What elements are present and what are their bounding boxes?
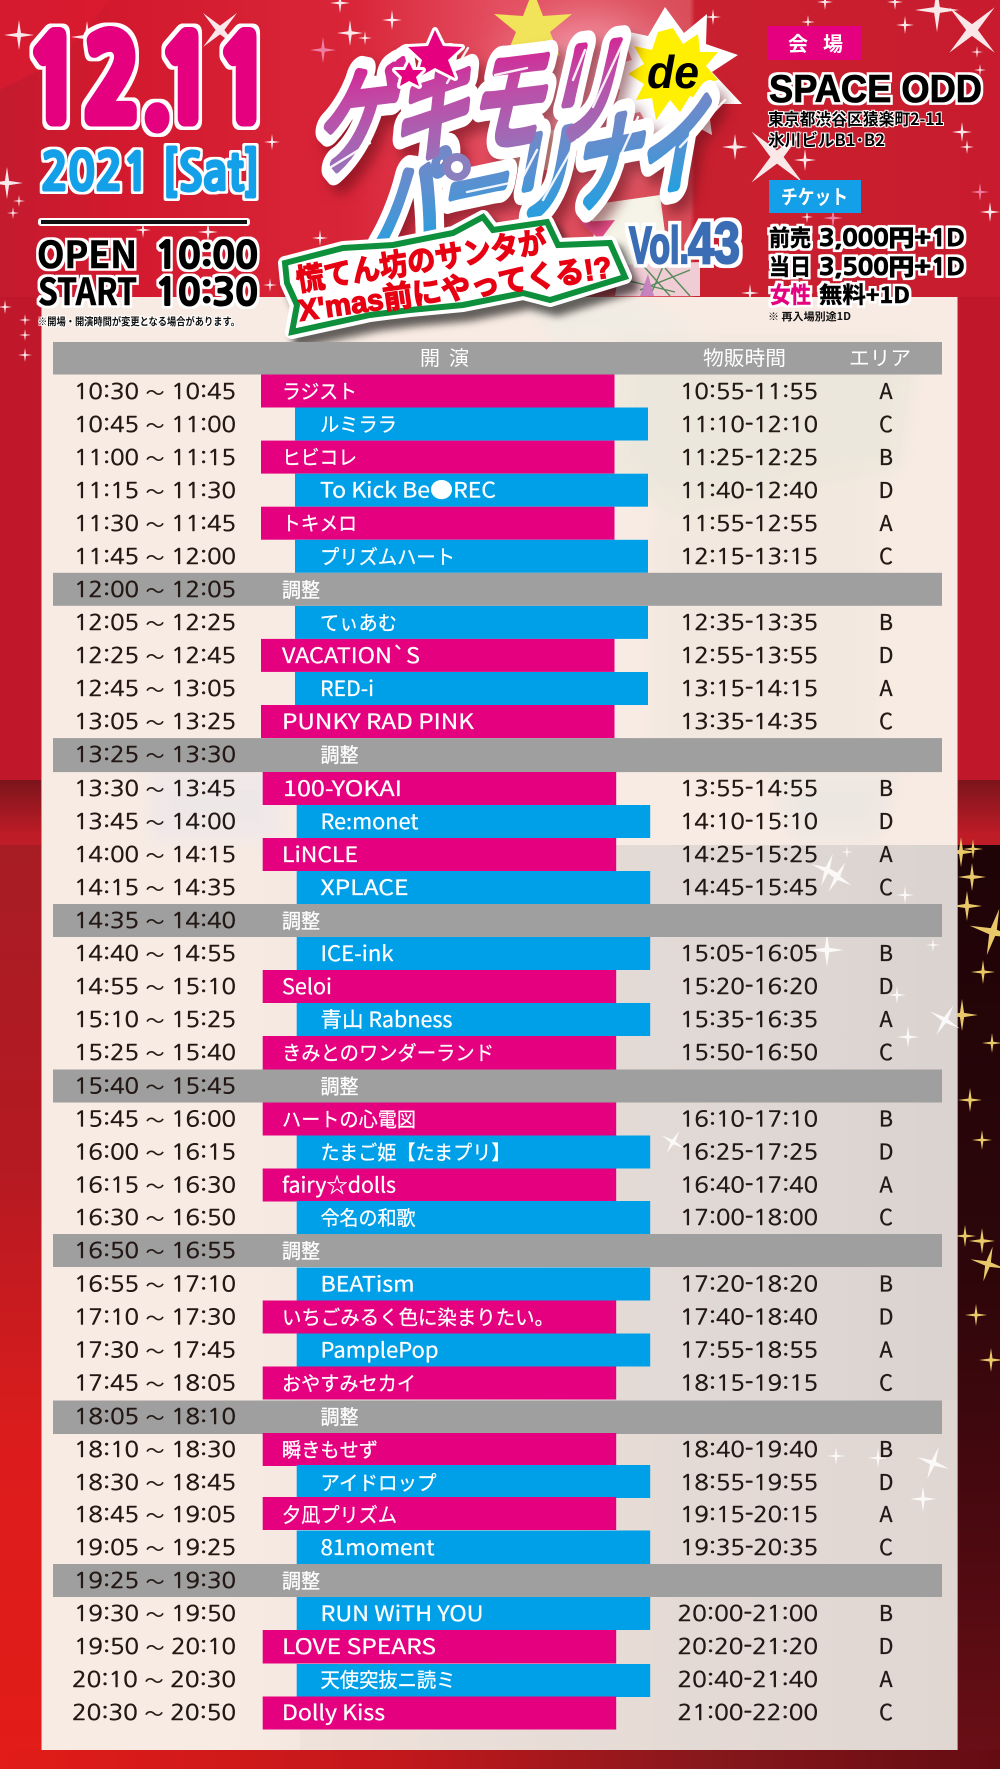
row 16:15 fairy☆dolls: fairy☆dolls [282,1170,396,1200]
volume number: 43 [688,211,740,276]
row 18:10 瞬きもせず: B [879,1433,893,1464]
row 12:25 VACATION`S [74,639,893,672]
label: ticket: チケット [781,181,848,210]
venue name and address: 東京都渋谷区猿楽町2-11 [768,106,944,130]
row 19:05 81moment [74,1530,893,1564]
row 15:25 きみとのワンダーランド: きみとのワンダーランド [282,1037,494,1066]
row 11:00 ヒビコレ: B [879,441,893,472]
row 15:40 調整 [53,1070,942,1102]
row 14:35 調整: 14:35 ～ 14:40 [74,908,236,933]
row 14:35 調整 [53,904,942,937]
row 12:45 RED-i [74,672,893,705]
row 16:50 調整: 16:50 ～ 16:55 [74,1238,236,1263]
row 18:10 瞬きもせず: 瞬きもせず [282,1434,378,1463]
row 20:30 Dolly Kiss: 21:00-22:00 [678,1703,818,1724]
row 19:25 調整: 調整 [282,1565,320,1594]
note on time changes: ※開場・開演時間が変更となる場合があります。 [38,314,240,329]
row 18:30 アイドロップ: 18:30 ～ 18:45 [74,1470,236,1495]
row 15:10 青山 Rabness: A [879,1003,893,1034]
row 16:55 BEATism: 17:20-18:20 [680,1274,818,1296]
row 14:00 LiNCLE: 14:00 ～ 14:15 [74,842,236,867]
panel: timetable background [42,297,968,1750]
banner: subtitle: 慌てん坊のサンタが [293,217,549,300]
row 15:10 青山 Rabness: 15:35-16:35 [680,1010,818,1031]
row 15:10 青山 Rabness: 青山 Rabness [320,1004,453,1034]
row 13:30 100-YOKAI: B [879,772,893,803]
row 13:30 100-YOKAI: 100-YOKAI [283,773,402,803]
row 16:30 令名の和歌: C [879,1201,893,1232]
row 14:15 XPLACE: 14:45-15:45 [680,878,818,899]
row 18:30 アイドロップ: アイドロップ [320,1467,436,1496]
venue name and address: 氷川ビルB1･B2 [768,127,885,151]
row 11:00 ヒビコレ: ヒビコレ [282,442,357,471]
row 12:05 てぃあむ: 12:35-13:35 [680,613,818,634]
row 14:55 Seloi: 15:20-16:20 [680,977,818,998]
row 15:40 調整: 15:40 ～ 15:45 [74,1074,236,1098]
row 11:45 プリズムハート: プリズムハート [320,541,455,570]
ticket prices: 女性 [770,278,811,310]
row 18:30 アイドロップ: 18:55-19:55 [680,1473,818,1494]
row 19:30 RUN WiTH YOU: 19:30 ～ 19:50 [74,1601,236,1626]
row 13:45 Re:monet: 14:10-15:10 [680,812,818,833]
row 11:15 To Kick Be●REC: D [879,474,893,505]
row 20:30 Dolly Kiss [72,1696,893,1730]
row 12:45 RED-i: 13:15-14:15 [680,679,818,700]
row 18:45 夕凪プリズム: A [879,1498,893,1529]
row 18:30 アイドロップ [74,1465,893,1498]
row 20:10 天使突抜ニ読ミ: 20:40-21:40 [678,1670,818,1691]
row 12:05 てぃあむ: 12:05 ～ 12:25 [74,610,236,635]
row 16:30 令名の和歌: 令名の和歌 [320,1202,416,1231]
row 17:10 いちごみるく色に染まりたい。: いちごみるく色に染まりたい。 [282,1302,554,1330]
row 18:30 アイドロップ: D [879,1466,893,1497]
row 17:45 おやすみセカイ: 17:45 ～ 18:05 [74,1370,236,1396]
row 15:10 青山 Rabness: 15:10 ～ 15:25 [74,1007,236,1032]
row 20:10 天使突抜ニ読ミ: 天使突抜ニ読ミ [320,1664,456,1693]
row 17:30 PamplePop: 17:55-18:55 [680,1340,818,1362]
row 12:45 RED-i: A [879,672,893,703]
row 11:15 To Kick Be●REC: 11:40-12:40 [680,481,818,502]
row 14:15 XPLACE [74,871,893,904]
row 11:30 トキメロ: 11:55-12:55 [680,514,818,535]
row 19:05 81moment: C [879,1531,893,1562]
row 19:50 LOVE SPEARS: LOVE SPEARS [282,1631,436,1661]
year and weekday: 2021 [Sat] [41,147,260,198]
row 16:50 調整: 調整 [282,1235,320,1264]
row 11:30 トキメロ: A [879,507,893,538]
row 16:30 令名の和歌 [74,1201,893,1234]
row 10:30 ラジスト: A [879,375,893,406]
table header [53,342,942,374]
row 19:25 調整: 19:25 ～ 19:30 [74,1568,236,1593]
row 13:05 PUNKY RAD PINK: 13:35-14:35 [680,712,818,733]
venue name and address: SPACE ODD [769,68,982,111]
row 19:50 LOVE SPEARS [74,1630,893,1664]
row 18:05 調整: 調整 [320,1401,358,1430]
icon: stars on logo [395,30,462,86]
row 16:15 fairy☆dolls [74,1168,893,1202]
row 14:00 LiNCLE: 14:25-15:25 [680,845,818,866]
row 11:00 ヒビコレ [74,441,893,474]
row 18:05 調整: 18:05 ～ 18:10 [74,1404,236,1429]
row 14:00 LiNCLE: LiNCLE [282,839,358,869]
row 12:45 RED-i: 12:45 ～ 13:05 [74,676,236,701]
row 12:00 調整: 12:00 ～ 12:05 [74,577,236,602]
open and start times: 10:30 [155,274,258,311]
row 11:45 プリズムハート: 11:45 ～ 12:00 [74,544,236,569]
row 10:45 ルミララ: C [879,408,893,439]
badge: de starburst [605,7,742,138]
label: venue: 会 場 [788,28,843,57]
row 11:45 プリズムハート: 12:15-13:15 [680,547,818,568]
row 14:55 Seloi: 14:55 ～ 15:10 [74,974,236,999]
date: 12.11: 12.11 [27,26,271,137]
decoration: tree top star and flowers behind logo [494,0,700,296]
row 16:55 BEATism: B [879,1268,893,1298]
row 18:45 夕凪プリズム [74,1497,893,1530]
row 10:30 ラジスト: ラジスト [282,376,357,404]
divider line [38,218,250,226]
row 11:45 プリズムハート [74,540,893,573]
row 13:05 PUNKY RAD PINK [74,705,893,738]
row 15:45 ハートの心電図 [74,1102,893,1136]
venue name and address [768,68,982,151]
row 17:45 おやすみセカイ [74,1366,893,1400]
row 18:10 瞬きもせず: 18:10 ～ 18:30 [74,1437,236,1462]
row 14:00 LiNCLE [74,838,893,871]
row 15:10 青山 Rabness [74,1003,893,1036]
row 13:05 PUNKY RAD PINK: PUNKY RAD PINK [282,706,474,736]
row 15:45 ハートの心電図: B [879,1102,893,1134]
volume number: Vol. [629,217,689,275]
row 16:30 令名の和歌: 16:30 ～ 16:50 [74,1205,236,1230]
ticket prices: 前売 [769,221,811,253]
row 19:05 81moment: 19:05 ～ 19:25 [74,1535,236,1560]
row 13:25 調整: 13:25 ～ 13:30 [74,742,236,767]
row 19:30 RUN WiTH YOU: RUN WiTH YOU [320,1598,484,1628]
row 18:45 夕凪プリズム: 夕凪プリズム [282,1499,397,1528]
ticket prices: 3,000円+1D [819,228,965,250]
row 11:45 プリズムハート: C [879,540,893,571]
row 10:30 ラジスト [74,374,893,408]
row 18:45 夕凪プリズム: 19:15-20:15 [680,1505,818,1526]
row 15:45 ハートの心電図: 16:10-17:10 [680,1110,818,1130]
row 20:10 天使突抜ニ読ミ: 20:10 ～ 20:30 [72,1667,236,1692]
row 12:00 調整: 調整 [282,574,320,603]
row 20:10 天使突抜ニ読ミ [72,1663,893,1697]
row 19:25 調整 [53,1564,942,1597]
row 14:55 Seloi: Seloi [282,971,332,1001]
badge: de starburst: de [647,46,699,98]
row 10:45 ルミララ [74,408,893,440]
ticket prices: 当日 [769,250,811,282]
row 15:25 きみとのワンダーランド: C [879,1036,893,1067]
row 16:00 たまご姫【たまプリ】: 16:25-17:25 [680,1142,818,1164]
row 11:15 To Kick Be●REC [74,474,893,507]
row 14:15 XPLACE: C [879,871,893,902]
row 17:30 PamplePop: 17:30 ～ 17:45 [74,1338,236,1362]
row 16:50 調整 [53,1234,942,1267]
row 16:00 たまご姫【たまプリ】 [74,1136,893,1168]
row 13:05 PUNKY RAD PINK: 13:05 ～ 13:25 [74,709,236,734]
row 13:45 Re:monet: 13:45 ～ 14:00 [74,809,236,834]
label: venue [768,26,861,60]
row 13:30 100-YOKAI: 13:55-14:55 [680,779,818,800]
row 10:45 ルミララ: ルミララ [320,408,397,438]
logo title [306,0,726,279]
row 17:30 PamplePop [74,1334,893,1366]
ticket prices [768,221,965,324]
row 10:45 ルミララ: 11:10-12:10 [680,415,818,436]
row 16:55 BEATism [74,1268,893,1300]
row 14:55 Seloi [74,970,893,1003]
row 14:40 ICE-ink: ICE-ink [320,938,394,968]
row 13:05 PUNKY RAD PINK: C [879,705,893,736]
open and start times: OPEN [37,225,137,279]
row 18:05 調整 [53,1400,942,1434]
row 17:10 いちごみるく色に染まりたい。: 17:10 ～ 17:30 [74,1304,236,1330]
row 13:25 調整 [53,738,942,772]
row 19:30 RUN WiTH YOU: B [879,1597,893,1628]
row 11:30 トキメロ: 11:30 ～ 11:45 [74,511,236,536]
row 16:00 たまご姫【たまプリ】: たまご姫【たまプリ】 [320,1136,510,1166]
row 17:45 おやすみセカイ: おやすみセカイ [282,1368,416,1396]
row 12:45 RED-i: RED-i [320,673,374,703]
row 19:30 RUN WiTH YOU: 20:00-21:00 [678,1604,818,1625]
ticket prices: 無料+1D [819,278,910,310]
row 13:30 100-YOKAI [74,772,893,805]
row 19:05 81moment: 19:35-20:35 [680,1538,818,1559]
row 19:50 LOVE SPEARS: D [879,1630,893,1661]
row 12:05 てぃあむ: てぃあむ [320,607,397,636]
row 16:15 fairy☆dolls: 16:40-17:40 [680,1176,818,1196]
row 18:10 瞬きもせず [74,1433,893,1466]
timetable rows [53,374,942,1730]
row 17:45 おやすみセカイ: C [879,1366,893,1398]
row 15:25 きみとのワンダーランド [74,1036,893,1070]
row 11:15 To Kick Be●REC: To Kick Be●REC [320,475,496,505]
row 12:05 てぃあむ: B [879,606,893,637]
row 14:40 ICE-ink: B [879,937,893,968]
row 19:30 RUN WiTH YOU [74,1597,893,1630]
banner: subtitle [285,217,625,332]
ticket prices: ※ 再入場別途1D [768,309,851,324]
row 12:25 VACATION`S: 12:55-13:55 [680,646,818,667]
row 10:30 ラジスト: 10:30 ～ 10:45 [74,379,236,404]
row 16:15 fairy☆dolls: 16:15 ～ 16:30 [74,1172,236,1198]
row 11:30 トキメロ: トキメロ [282,508,357,537]
row 16:15 fairy☆dolls: A [879,1168,893,1200]
row 17:10 いちごみるく色に染まりたい。: 17:40-18:40 [680,1308,818,1328]
row 14:55 Seloi: D [879,970,893,1001]
row 19:50 LOVE SPEARS: 20:20-21:20 [678,1637,818,1658]
open and start times [37,225,258,316]
row 12:25 VACATION`S: 12:25 ～ 12:45 [74,643,236,668]
row 18:45 夕凪プリズム: 18:45 ～ 19:05 [74,1502,236,1527]
row 15:45 ハートの心電図: 15:45 ～ 16:00 [74,1106,236,1132]
row 14:00 LiNCLE: A [879,838,893,869]
row 20:30 Dolly Kiss: Dolly Kiss [282,1697,385,1727]
row 11:00 ヒビコレ: 11:00 ～ 11:15 [74,445,236,470]
row 16:55 BEATism: 16:55 ～ 17:10 [74,1272,236,1296]
row 13:25 調整: 調整 [320,739,358,768]
logo: line two パーリナイ: パーリナイ [367,54,726,279]
open and start times: START [38,262,137,316]
row 11:00 ヒビコレ: 11:25-12:25 [680,448,818,469]
table header: 開 演 [420,342,469,371]
row 14:40 ICE-ink: 15:05-16:05 [680,944,818,965]
logo: gloss highlights [323,38,725,200]
row 12:00 調整 [53,573,942,606]
row 17:10 いちごみるく色に染まりたい。: D [879,1300,893,1332]
row 18:10 瞬きもせず: 18:40-19:40 [680,1440,818,1461]
row 15:45 ハートの心電図: ハートの心電図 [282,1104,416,1132]
ticket prices: 3,500円+1D [819,257,965,279]
row 11:15 To Kick Be●REC: 11:15 ～ 11:30 [74,478,236,503]
row 15:25 きみとのワンダーランド: 15:25 ～ 15:40 [74,1040,236,1065]
logo title: パーリナイ [367,54,726,279]
row 13:30 100-YOKAI: 13:30 ～ 13:45 [74,776,236,801]
row 10:45 ルミララ: 10:45 ～ 11:00 [74,412,236,437]
row 19:50 LOVE SPEARS: 19:50 ～ 20:10 [74,1634,236,1659]
row 20:30 Dolly Kiss: 20:30 ～ 20:50 [72,1700,236,1725]
row 14:40 ICE-ink [74,937,893,970]
row 14:35 調整: 調整 [282,905,320,934]
banner: subtitle: X'mas前にやってくる!? [296,251,614,328]
row 15:25 きみとのワンダーランド: 15:50-16:50 [680,1043,818,1064]
row 16:30 令名の和歌: 17:00-18:00 [680,1208,818,1229]
row 20:10 天使突抜ニ読ミ: A [879,1663,893,1694]
row 17:30 PamplePop: A [879,1334,893,1364]
row 16:00 たまご姫【たまプリ】: D [879,1136,893,1166]
table header: エリア [849,342,911,371]
row 17:10 いちごみるく色に染まりたい。 [74,1300,893,1334]
row 20:30 Dolly Kiss: C [879,1696,893,1727]
row 15:40 調整: 調整 [320,1070,358,1100]
row 16:00 たまご姫【たまプリ】: 16:00 ～ 16:15 [74,1140,236,1164]
row 17:45 おやすみセカイ: 18:15-19:15 [680,1374,818,1394]
row 10:30 ラジスト: 10:55-11:55 [680,382,818,403]
row 19:05 81moment: 81moment [320,1532,435,1562]
row 11:30 トキメロ [74,507,893,540]
row 14:15 XPLACE: XPLACE [320,872,408,902]
row 13:45 Re:monet [74,805,893,838]
row 17:30 PamplePop: PamplePop [320,1334,438,1364]
table header: 物販時間 [703,342,786,371]
row 14:15 XPLACE: 14:15 ～ 14:35 [74,875,236,900]
row 14:40 ICE-ink: 14:40 ～ 14:55 [74,941,236,966]
row 12:05 てぃあむ [74,606,893,639]
row 12:25 VACATION`S: D [879,639,893,670]
row 13:45 Re:monet: Re:monet [320,806,419,836]
row 13:45 Re:monet: D [879,805,893,836]
row 16:55 BEATism: BEATism [320,1268,414,1298]
row 12:25 VACATION`S: VACATION`S [282,640,420,670]
open and start times: 10:00 [155,237,258,274]
